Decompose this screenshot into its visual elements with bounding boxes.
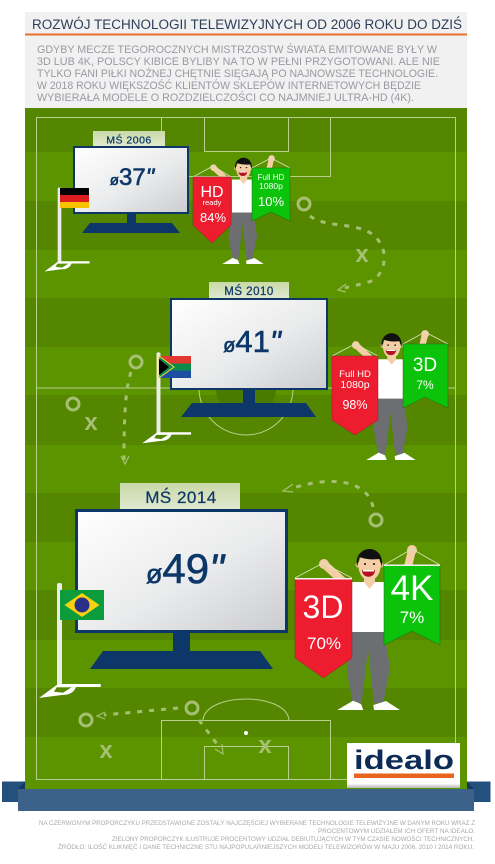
play diagrams: x xyxy=(258,732,272,759)
logo: idealo: idealo xyxy=(354,745,454,775)
logo: idealo xyxy=(347,743,460,788)
footnote: PROCENTOWYM UDZIAŁEM ICH OFERT NA IDEALO. xyxy=(318,828,475,835)
section: MŚ 2010 xyxy=(142,282,448,460)
fan 2006 xyxy=(193,155,290,264)
pennant red 2010 xyxy=(332,344,378,435)
television 2006 xyxy=(74,147,188,233)
television 2014: ø49" xyxy=(146,545,226,592)
pennant red 2006: HD xyxy=(200,184,224,201)
pennant red 2006: ready xyxy=(203,198,222,207)
pennant green 2010: 3D xyxy=(413,355,437,376)
title: ROZWÓJ TECHNOLOGII TELEWIZYJNYCH OD 2006 ROKU DO DZIŚ xyxy=(32,17,462,32)
pennant green 2014 xyxy=(384,549,440,645)
fan 2010 xyxy=(332,330,448,460)
header panel xyxy=(25,12,467,108)
pennant green 2006 xyxy=(252,158,290,221)
football pitch xyxy=(25,108,467,789)
intro text: WYBIERAŁA MODELE O ROZDZIELCZOŚCI CO NAJMNIEJ ULTRA-HD (4K). xyxy=(37,91,414,104)
flag: Germany xyxy=(45,188,90,271)
year label 2006 xyxy=(93,131,165,146)
pennant green 2010: 7% xyxy=(416,378,434,392)
television 2006: ø37" xyxy=(110,164,156,191)
intro text: 3D LUB 4K, POLSCY KIBICE BYLIBY NA TO W PEŁNI PRZYGOTOWANI. ALE NIE xyxy=(37,56,440,68)
flag: Brazil xyxy=(39,583,104,698)
pennant red 2006 xyxy=(193,166,231,243)
section: MŚ 2014 xyxy=(39,483,440,710)
pennant red 2014: 3D xyxy=(303,589,343,625)
pennant red 2006: 84% xyxy=(200,210,226,225)
year label 2010: MŚ 2010 xyxy=(224,285,274,298)
footnote: ŹRÓDŁO: ILOŚĆ KLIKNIĘĆ I DANE TECHNICZNE STU NAJPOPULARNIEJSZYCH MODELI TELEWIZORÓW W MAJU 2006, 2010 I 2014 ROKU. xyxy=(58,842,474,851)
television 2010 xyxy=(171,299,327,417)
play diagrams xyxy=(67,198,384,764)
intro text: TYLKO FANI PIŁKI NOŻNEJ CHĘTNIE SIĘGAJĄ PO NAJNOWSZE TECHNOLOGIE. xyxy=(37,67,438,80)
intro text: W 2018 ROKU WIĘKSZOŚĆ KLIENTÓW SKLEPÓW INTERNETOWYCH BĘDZIE xyxy=(37,79,421,92)
pennant green 2006: 1080p xyxy=(259,181,283,191)
year label 2014: MŚ 2014 xyxy=(145,488,217,507)
television 2014 xyxy=(76,510,286,669)
play diagrams: x xyxy=(99,737,113,764)
play diagrams: x xyxy=(355,241,369,268)
year label 2014 xyxy=(120,483,240,509)
ribbon front xyxy=(18,789,474,811)
pennant green 2006: Full HD xyxy=(258,173,285,182)
year label 2006: MŚ 2006 xyxy=(106,134,152,146)
pennant red 2014: 70% xyxy=(307,634,341,653)
year label 2010 xyxy=(209,282,289,298)
pennant red 2014 xyxy=(295,563,352,678)
fan 2014 xyxy=(295,545,440,710)
footnote xyxy=(39,818,475,851)
intro text xyxy=(37,43,440,104)
flag: South Africa xyxy=(142,352,191,443)
pennant red 2010: Full HD xyxy=(339,369,371,380)
pennant red 2010: 1080p xyxy=(340,379,370,391)
intro text: GDYBY MECZE TEGOROCZNYCH MISTRZOSTW ŚWIATA EMITOWANE BYŁY W xyxy=(37,43,438,56)
television 2010: ø41" xyxy=(223,324,283,359)
pennant red 2010: 98% xyxy=(342,398,368,412)
play diagrams: x xyxy=(84,409,98,436)
pennant green 2014: 7% xyxy=(400,608,424,627)
pennant green 2010 xyxy=(403,332,448,408)
ribbon behind pitch xyxy=(2,782,490,802)
pennant green 2006: 10% xyxy=(258,194,284,209)
footnote: NA CZERWONYM PROPORCZYKU PRZEDSTAWIONE ZOSTAŁY NAJCZĘŚCIEJ WYBIERANE TECHNOLOGIE TELEWIZYJNE W DANYM ROKU WRAZ Z xyxy=(39,818,475,827)
section: MŚ 2006 xyxy=(45,131,290,271)
pennant green 2014: 4K xyxy=(391,569,433,608)
footnote: ZIELONY PROPORCZYK ILUSTRUJE PROCENTOWY UDZIAŁ DEBIUTUJĄCYCH W TYM CZASIE NOWOŚCI TECHNICZNYCH. xyxy=(112,834,474,843)
